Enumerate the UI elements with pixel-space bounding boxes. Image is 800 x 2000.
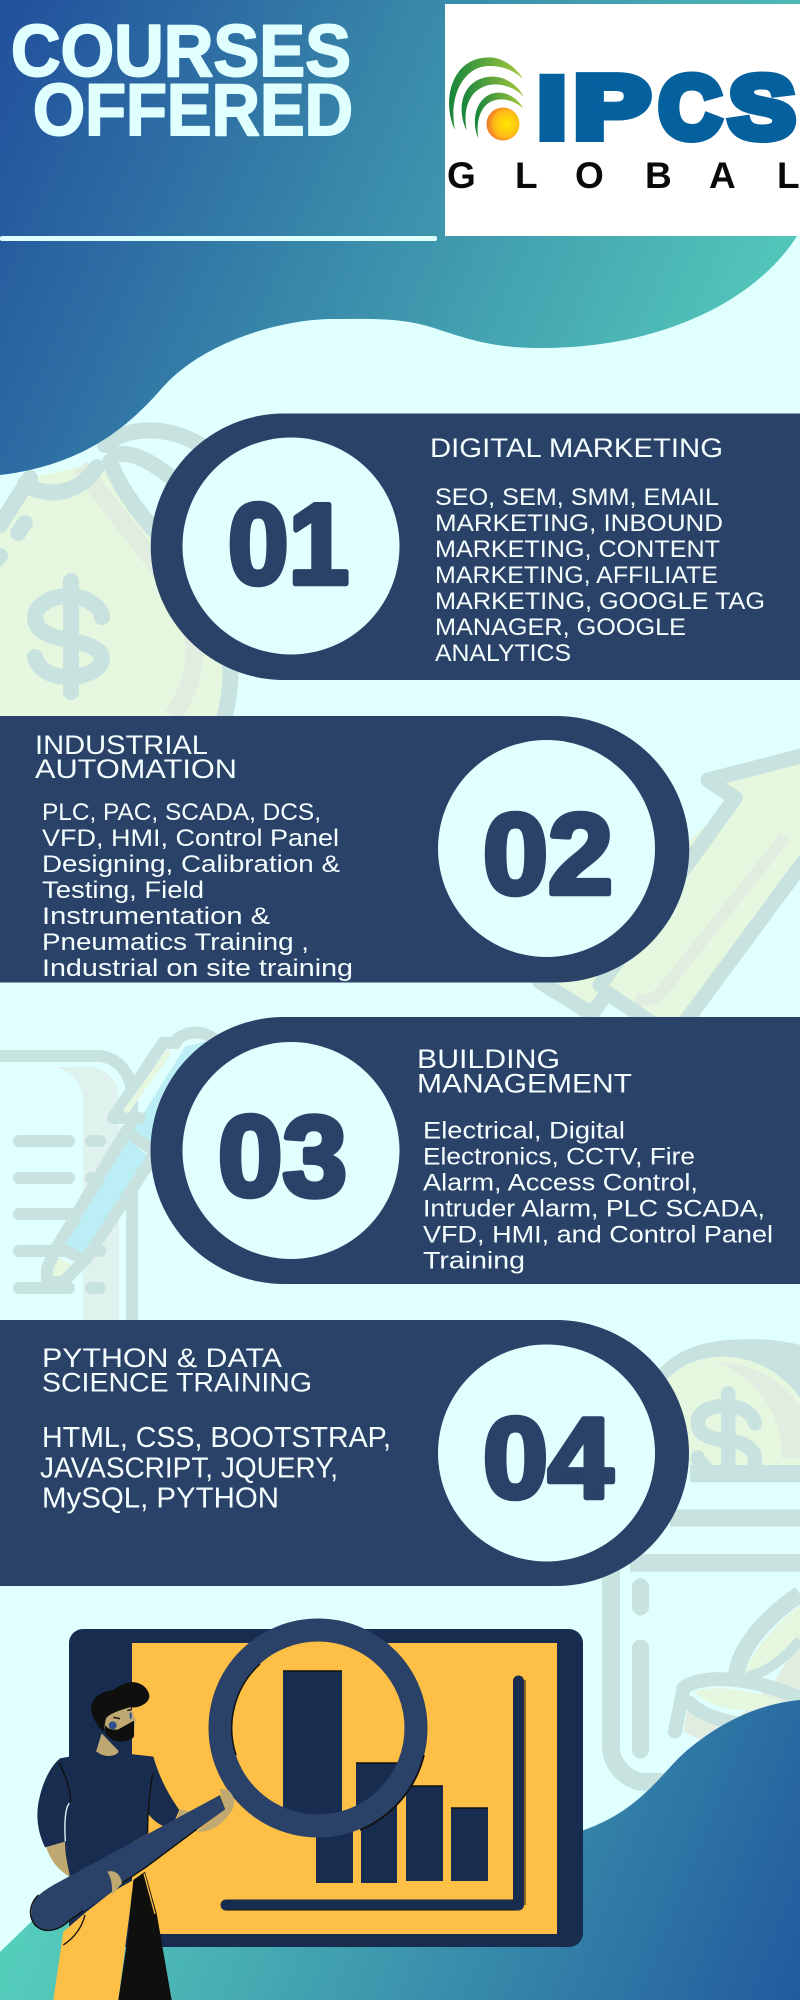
body text: JAVASCRIPT, JQUERY, [40, 1452, 338, 1484]
title: courses offered: OFFERED [33, 70, 353, 151]
heading: DIGITAL MARKETING [430, 433, 723, 463]
body text: MARKETING, INBOUND [435, 510, 723, 537]
body text: Electrical, Digital [423, 1118, 625, 1144]
body text [42, 799, 353, 982]
logo wordmark: C [659, 58, 721, 156]
panel 3: building management [150, 1017, 800, 1284]
body text: MANAGER, GOOGLE [435, 614, 686, 641]
watermark icon: money bag [0, 430, 231, 716]
title: courses offered [11, 11, 353, 151]
heading: BUILDING [417, 1044, 560, 1074]
head [103, 1705, 136, 1738]
body text: Alarm, Access Control, [423, 1170, 698, 1196]
logo wordmark: S [729, 58, 795, 156]
bottom gradient wave [0, 1700, 800, 2000]
body text: VFD, HMI, and Control Panel [423, 1222, 773, 1248]
heading [417, 1044, 632, 1098]
title: courses offered: COURSES [11, 11, 351, 92]
header underline [0, 236, 437, 241]
heading: AUTOMATION [35, 754, 237, 784]
body text: Designing, Calibration & [42, 851, 340, 878]
magnifier handle [31, 1795, 225, 1930]
number 01: 01 [228, 482, 349, 608]
logo: IPCS Global [445, 4, 800, 236]
body text: Training [423, 1248, 525, 1274]
panel 2: industrial automation [0, 716, 689, 982]
logo wordmark [540, 58, 795, 156]
logo subtitle: GLOBAL [447, 155, 800, 196]
body text: Testing, Field [42, 877, 204, 904]
body text: Intruder Alarm, PLC SCADA, [423, 1196, 765, 1222]
body text: Instrumentation & [42, 903, 270, 930]
body text: MySQL, PYTHON [42, 1482, 279, 1514]
logo wordmark: I [540, 63, 564, 154]
body text: ANALYTICS [435, 640, 571, 667]
watermark icon: rising arrow [540, 755, 800, 1025]
watermark icon: paper and pen [0, 1033, 230, 1320]
body text [435, 484, 765, 667]
body text: HTML, CSS, BOOTSTRAP, [42, 1422, 391, 1454]
neck [96, 1733, 119, 1756]
top gradient wave with header [0, 0, 800, 475]
hands [197, 1789, 234, 1832]
illustration: analyst with magnifier and bar chart [30, 1629, 583, 2000]
panel 1: digital marketing [151, 414, 800, 680]
body text: PLC, PAC, SCADA, DCS, [42, 799, 321, 826]
legs [53, 1880, 133, 2000]
heading: PYTHON & DATA [42, 1343, 282, 1373]
heading: INDUSTRIAL [35, 730, 208, 760]
heading [35, 730, 237, 784]
panel 4: python and data science [0, 1320, 689, 1586]
magnifier lens with enlarged bars [220, 1630, 488, 1833]
body text: Industrial on site training [42, 955, 353, 982]
body text: Electronics, CCTV, Fire [423, 1144, 695, 1170]
heading: MANAGEMENT [417, 1068, 632, 1098]
logo icon: signal arcs and sun [449, 57, 524, 140]
body text: VFD, HMI, Control Panel [42, 825, 339, 852]
monitor [69, 1629, 583, 1947]
watermark icon: coins, notes and plant [611, 1339, 800, 1782]
heading [42, 1343, 312, 1398]
body text: MARKETING, CONTENT [435, 536, 720, 563]
body text: Pneumatics Training , [42, 929, 309, 956]
body text: MARKETING, GOOGLE TAG [435, 588, 765, 615]
logo wordmark: P [574, 58, 650, 156]
person [30, 1682, 234, 2000]
forearm skin [46, 1842, 83, 1877]
sweater [37, 1752, 179, 1877]
heading: SCIENCE TRAINING [42, 1368, 312, 1398]
number 04: 04 [483, 1396, 613, 1522]
body text [423, 1118, 773, 1274]
number 03: 03 [218, 1094, 347, 1220]
body text: MARKETING, AFFILIATE [435, 562, 718, 589]
number 02: 02 [483, 792, 613, 918]
body text [40, 1422, 391, 1514]
bar chart [226, 1680, 525, 1910]
body text: SEO, SEM, SMM, EMAIL [435, 484, 719, 511]
